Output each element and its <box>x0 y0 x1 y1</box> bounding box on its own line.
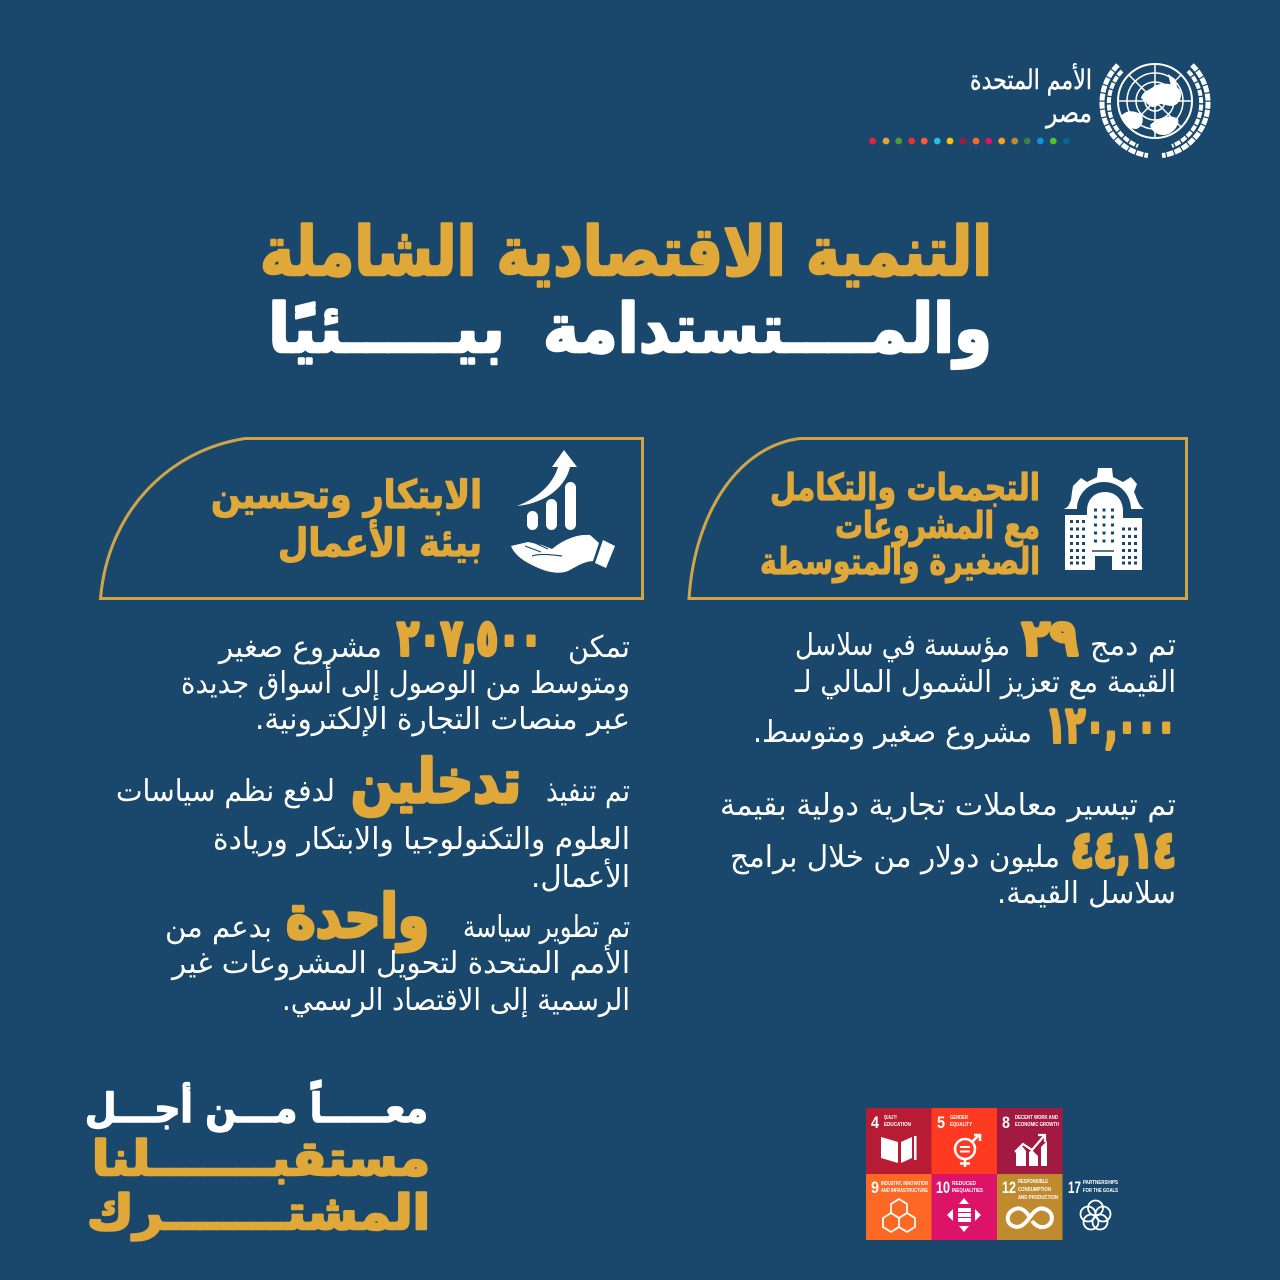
stat: two interventions: تدخلين <box>351 747 521 817</box>
SDG 5 tile <box>932 1108 997 1174</box>
logo text: مصر <box>1044 98 1092 129</box>
text block: innovation results: العلوم والتكنولوجيا والابتكار وريادة <box>213 822 630 857</box>
text block: value chain integration: تم دمج <box>1090 628 1176 663</box>
panel heading: بيئة الأعمال <box>278 518 482 566</box>
panel: clusters and SME integration <box>689 438 1186 598</box>
panel heading: الصغيرة والمتوسطة <box>760 540 1040 583</box>
SDG 12 tile: RESPONSIBLE <box>1018 1179 1048 1185</box>
text block: innovation results: عبر منصات التجارة الإلكترونية. <box>255 702 630 737</box>
SDG 9 tile: INDUSTRY, INNOVATION <box>881 1181 928 1187</box>
stat: 44.14: ٤٤,١٤ <box>1071 821 1176 879</box>
logo text <box>970 62 1092 129</box>
panel frame <box>689 438 1186 598</box>
panel heading: التجمعات والتكامل <box>770 466 1040 509</box>
SDG 5 tile: GENDER <box>950 1115 968 1121</box>
SDG 5 tile: EQUALITY <box>950 1122 972 1128</box>
text block: innovation results: تم تطوير سياسة <box>463 910 630 945</box>
SDG 10 tile: REDUCED <box>952 1181 976 1187</box>
panel heading: مع المشروعات <box>835 504 1040 547</box>
SDG 10 tile: INEQUALITIES <box>952 1188 983 1194</box>
SDG 8 tile: ECONOMIC GROWTH <box>1015 1122 1059 1128</box>
title <box>260 213 992 369</box>
text block: innovation results: بدعم من <box>165 910 272 945</box>
SDG 12 tile: AND PRODUCTION <box>1018 1195 1058 1201</box>
panel heading <box>211 473 482 566</box>
icon: building with gear <box>1063 468 1144 570</box>
text block: value chain integration: القيمة مع تعزيز الشمول المالي لـ <box>794 665 1176 700</box>
SDG 8 tile: DECENT WORK AND <box>1015 1115 1058 1121</box>
text block: innovation results: تمكن <box>568 630 630 665</box>
title: التنمية الاقتصادية الشاملة <box>260 213 992 292</box>
SDG 9 tile: AND INFRASTRUCTURE <box>881 1188 928 1194</box>
closing slogan <box>85 1079 430 1241</box>
SDG 4 tile: QUALITY <box>884 1115 897 1121</box>
text block: innovation results: مشروع صغير <box>217 630 382 665</box>
SDG 8 tile: 8 <box>1002 1113 1010 1132</box>
text block: value chain integration: مليون دولار من خلال برامج <box>730 840 1060 875</box>
SDG icons grid <box>866 1108 1118 1240</box>
SDG 4 tile <box>866 1108 932 1174</box>
panel frame <box>100 438 642 598</box>
stat: 29: ٢٩ <box>1022 609 1078 667</box>
SDG 12 tile <box>997 1174 1062 1240</box>
text block: innovation results: ومتوسط من الوصول إلى أسواق جديدة <box>181 662 630 701</box>
panel: innovation and business environment <box>100 438 642 598</box>
panel heading: الابتكار وتحسين <box>211 473 482 518</box>
SDG 12 tile: CONSUMPTION <box>1018 1187 1051 1193</box>
SDG 9 tile: 9 <box>871 1178 879 1197</box>
text block: innovation results: الأعمال. <box>531 857 630 895</box>
SDG 10 tile: 10 <box>936 1178 950 1197</box>
closing slogan: مستقبـــــــلنا <box>92 1131 430 1187</box>
SDG 17 label <box>1068 1178 1118 1230</box>
logo: UN Egypt <box>869 62 1208 156</box>
text block: value chain integration: مؤسسة في سلاسل <box>795 628 1010 663</box>
text block: innovation results: الأمم المتحدة لتحويل المشروعات غير <box>170 943 630 981</box>
icon: UN emblem <box>1102 64 1208 156</box>
SDG 12 tile: 12 <box>1002 1178 1016 1197</box>
text block: innovation results: لدفع نظم سياسات <box>116 774 335 809</box>
text block: value chain integration: تم تيسير معاملات تجارية دولية بقيمة <box>720 788 1176 823</box>
text block: value chain integration: سلاسل القيمة. <box>997 876 1176 911</box>
text block: innovation results <box>116 609 630 1018</box>
SDG 17 label: PARTNERSHIPS <box>1083 1180 1118 1186</box>
SDG colour dots <box>869 138 1070 144</box>
text block: value chain integration <box>720 609 1176 911</box>
SDG 4 tile: 4 <box>871 1113 879 1132</box>
SDG 17 label: 17 <box>1068 1178 1081 1197</box>
stat: one policy: واحدة <box>286 882 429 952</box>
stat: 120,000: ١٢٠,٠٠٠ <box>1046 696 1176 754</box>
SDG 9 tile <box>866 1174 932 1240</box>
panel heading <box>760 466 1040 583</box>
SDG 10 tile <box>932 1174 997 1240</box>
text block: innovation results: الرسمية إلى الاقتصاد الرسمي. <box>282 983 630 1018</box>
closing slogan: معـــــاً مـــن أجـــل <box>85 1079 428 1132</box>
SDG 5 tile: 5 <box>937 1113 945 1132</box>
title: والمــــتستدامة <box>543 290 992 369</box>
text block: value chain integration: مشروع صغير ومتوسط. <box>753 715 1032 750</box>
stat: 207,500: ٢٠٧,٥٠٠ <box>397 609 542 667</box>
SDG 17 label: FOR THE GOALS <box>1083 1188 1118 1194</box>
icon: hand with growth chart <box>511 450 615 573</box>
text block: innovation results: تم تنفيذ <box>546 774 630 809</box>
closing slogan: المشتـــــــرك <box>87 1185 430 1241</box>
SDG 4 tile: EDUCATION <box>884 1122 911 1128</box>
logo text: الأمم المتحدة <box>970 62 1092 96</box>
SDG 8 tile <box>997 1108 1062 1174</box>
title: بيـــــئيًا <box>268 290 505 369</box>
